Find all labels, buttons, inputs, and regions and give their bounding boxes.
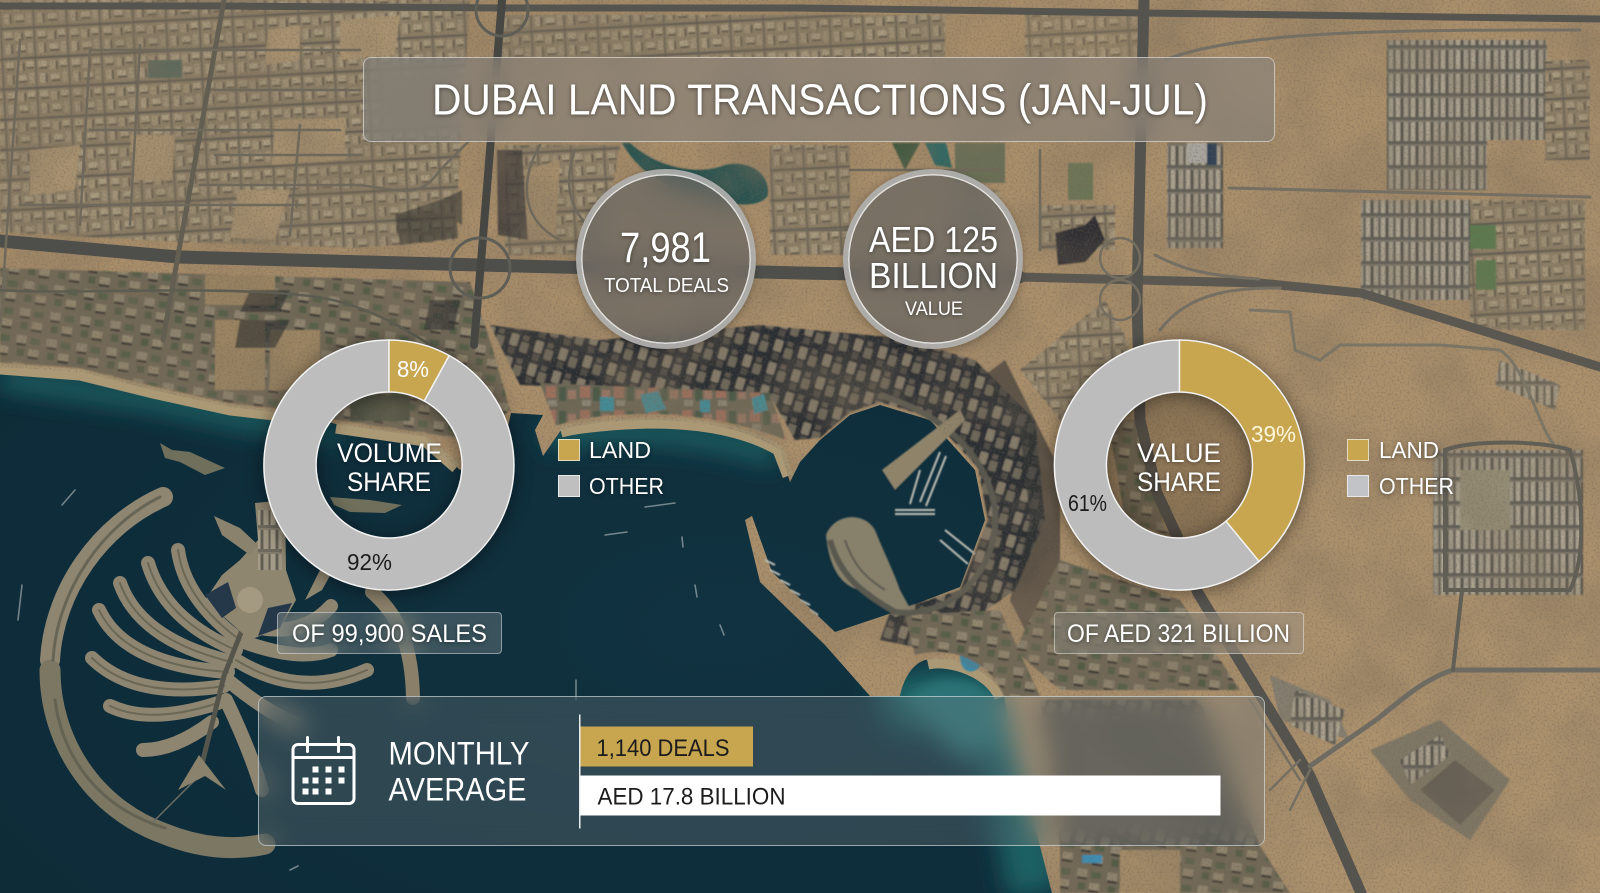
district: southern industrial bbox=[1270, 675, 1350, 740]
district: marina towers bbox=[490, 325, 1045, 650]
palm crown and trunk base bbox=[178, 500, 336, 790]
caption: of AED 321 billion: OF AED 321 BILLION bbox=[1067, 620, 1290, 648]
swatch: land bbox=[558, 440, 580, 460]
title: DUBAI LAND TRANSACTIONS (JAN-JUL) bbox=[432, 76, 1208, 124]
legend: volume share bbox=[558, 437, 664, 499]
district: eastern townships bbox=[1387, 40, 1487, 190]
bar: value bbox=[580, 776, 1220, 816]
donut centre label: value share: VALUE bbox=[1137, 438, 1221, 468]
caption: of 99,900 sales: OF 99,900 SALES bbox=[292, 620, 487, 648]
stat value: AED 125 billion: AED 125 bbox=[869, 219, 998, 260]
donut chart: value share bbox=[1046, 330, 1316, 604]
donut centre label: value share: SHARE bbox=[1137, 467, 1221, 497]
stat label: total deals: TOTAL DEALS bbox=[604, 274, 729, 297]
lagoon bbox=[622, 143, 768, 204]
label: 92%: 92% bbox=[347, 549, 392, 575]
legend text: land: LAND bbox=[589, 437, 651, 463]
district: under bottom panel bbox=[1040, 700, 1260, 846]
segment: other 92% bbox=[264, 340, 514, 590]
bar: deals bbox=[580, 726, 753, 766]
beach sand bbox=[0, 369, 1000, 698]
heading: monthly average bbox=[388, 736, 530, 808]
donut centre label: value share bbox=[1137, 438, 1221, 497]
swatch: land bbox=[1348, 440, 1368, 460]
label: 61%: 61% bbox=[1068, 490, 1107, 516]
stat value: AED 125 billion bbox=[869, 219, 998, 296]
donut hole shading bbox=[1106, 392, 1252, 538]
bar axis bbox=[579, 714, 580, 828]
stat value: 7,981: 7,981 bbox=[620, 224, 711, 272]
label: 8%: 8% bbox=[397, 356, 429, 382]
donut centre label: volume share: SHARE bbox=[347, 467, 431, 497]
legend text: other: OTHER bbox=[589, 473, 664, 499]
bar: deals: 1,140 DEALS bbox=[596, 735, 730, 762]
heading: monthly average: AVERAGE bbox=[388, 772, 526, 808]
segment: land 39% bbox=[1180, 340, 1304, 561]
icon: calendar bbox=[293, 738, 354, 804]
donut centre label: volume share: VOLUME bbox=[337, 438, 442, 468]
caption: of AED 321 billion bbox=[1054, 612, 1304, 654]
label: 39%: 39% bbox=[1251, 421, 1296, 447]
panel: monthly average bbox=[258, 696, 1265, 846]
marina island and piers bbox=[826, 517, 912, 617]
legend text: land: LAND bbox=[1379, 437, 1439, 463]
district: coastal strip south of highway bbox=[0, 268, 510, 440]
caption: of 99,900 sales bbox=[277, 612, 502, 654]
stat circle: value bbox=[843, 169, 1023, 349]
district: north west villas bbox=[0, 0, 470, 248]
shallow coastal water bbox=[0, 378, 1035, 893]
bar: value: AED 17.8 BILLION bbox=[598, 784, 786, 810]
swatch: other bbox=[558, 476, 580, 496]
segment: other 61% bbox=[1054, 340, 1259, 590]
district: west of highway in value donut bbox=[1108, 420, 1195, 545]
swatch: other bbox=[1348, 476, 1368, 496]
heading: monthly average: MONTHLY bbox=[388, 736, 530, 772]
donut chart: volume share bbox=[258, 332, 520, 602]
segment: land 8% bbox=[389, 340, 449, 401]
stat value: AED 125 billion: BILLION bbox=[869, 255, 998, 296]
donut centre label: volume share bbox=[337, 438, 442, 497]
legend: value share bbox=[1347, 437, 1454, 499]
Palm Jumeirah island bbox=[50, 497, 413, 848]
stat label: value: VALUE bbox=[905, 299, 963, 320]
stat circle: total deals bbox=[576, 169, 756, 349]
title panel bbox=[363, 57, 1275, 142]
offshore islets bbox=[160, 443, 402, 513]
